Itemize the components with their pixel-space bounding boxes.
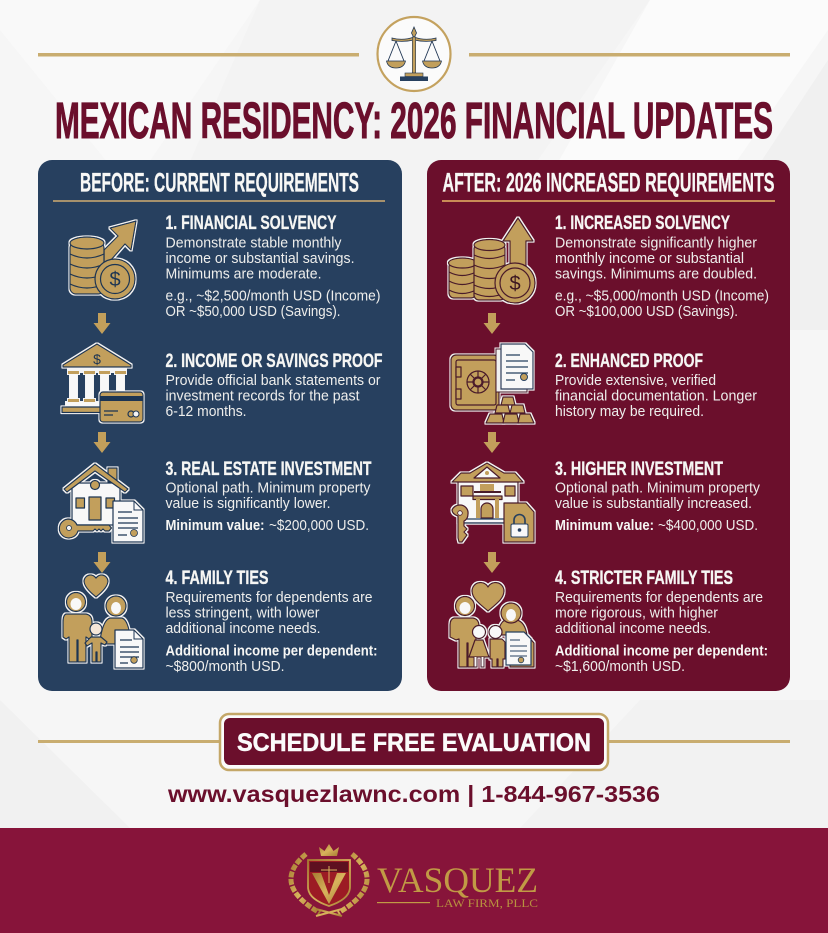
text: stricter family ties: additional income needs. xyxy=(555,621,711,637)
text: real estate investment: value is significantly lower. xyxy=(166,496,330,512)
text: enhanced proof xyxy=(555,351,757,420)
text: increased solvency: savings. Minimums are doubled. xyxy=(555,266,757,282)
text: family ties: less stringent, with lower xyxy=(166,606,320,622)
icon: larger family with document xyxy=(450,582,534,667)
text: family ties xyxy=(166,568,378,675)
footer band xyxy=(0,828,828,933)
text: income or savings proof: Provide official bank statements or xyxy=(166,373,381,389)
icon: coins with rising arrow: $ xyxy=(109,269,121,291)
text: income or savings proof: 2. INCOME OR SAVINGS PROOF xyxy=(166,351,382,372)
text: family ties: Requirements for dependents are xyxy=(166,590,372,606)
icon: coin stacks with up arrow: $ xyxy=(509,273,521,295)
arrow: step 2 to 3 xyxy=(94,432,110,453)
crown xyxy=(319,844,339,856)
CTA rule right xyxy=(607,740,790,743)
icon: bank and credit card xyxy=(62,344,143,422)
text: family ties: Additional income per dependent: xyxy=(166,644,378,660)
arrow: step 3 to 4 xyxy=(484,552,500,573)
text: stricter family ties: Requirements for dependents are xyxy=(555,590,763,606)
call to action button xyxy=(220,714,608,770)
icon: safe, documents and gold bars xyxy=(451,344,534,423)
logo wordmark: VASQUEZ xyxy=(377,860,538,900)
text: family ties: ~$800/month USD. xyxy=(166,659,284,675)
text: financial solvency: e.g., ~$2,500/month USD (Income) xyxy=(166,288,380,304)
text: financial solvency: income or substantial savings. xyxy=(166,251,354,267)
text: family ties: 4. FAMILY TIES xyxy=(166,568,268,589)
laurel wreath xyxy=(291,854,367,916)
icon: house, key and deed xyxy=(59,464,143,542)
icon: family with document xyxy=(63,575,143,668)
logo wordmark: LAW FIRM, PLLC xyxy=(436,896,538,910)
icon: coins with rising arrow xyxy=(70,221,136,299)
icon: mansion, key and locked document xyxy=(452,463,534,542)
text: income or savings proof: investment records for the past xyxy=(166,388,360,404)
text: real estate investment: 3. REAL ESTATE INVESTMENT xyxy=(166,459,372,480)
text: enhanced proof: financial documentation. Longer xyxy=(555,388,757,404)
contact details: www.vasquezlawnc.com | 1-844-967-3536 xyxy=(167,781,660,807)
panel background: after xyxy=(427,160,790,691)
icon: coin stacks with up arrow xyxy=(448,218,535,303)
heading rule: before xyxy=(53,200,385,202)
arrow: step 2 to 3 xyxy=(484,432,500,453)
arrow: step 1 to 2 xyxy=(94,313,110,334)
text: increased solvency: 1. INCREASED SOLVENCY xyxy=(555,213,730,234)
text: financial solvency: Demonstrate stable monthly xyxy=(166,236,342,252)
arrow: step 3 to 4 xyxy=(94,552,110,573)
text: enhanced proof: 2. ENHANCED PROOF xyxy=(555,351,703,372)
text: real estate investment xyxy=(166,459,372,534)
icon: bank and credit card: $ xyxy=(93,351,101,367)
text: financial solvency: OR ~$50,000 USD (Savings). xyxy=(166,304,340,320)
text: income or savings proof xyxy=(166,351,382,420)
text: increased solvency: e.g., ~$5,000/month USD (Income) xyxy=(555,288,769,304)
text: real estate investment: Minimum value: xyxy=(166,518,264,534)
heading rule: after xyxy=(442,200,775,202)
text: stricter family ties: 4. STRICTER FAMILY TIES xyxy=(555,568,733,589)
text: income or savings proof: 6-12 months. xyxy=(166,404,246,420)
text: enhanced proof: Provide extensive, verified xyxy=(555,373,716,389)
text: real estate investment: Optional path. Minimum property xyxy=(166,480,371,496)
text: financial solvency xyxy=(166,213,380,320)
text: stricter family ties: Additional income per dependent: xyxy=(555,644,768,660)
text: financial solvency: 1. FINANCIAL SOLVENCY xyxy=(166,213,337,234)
text: higher investment xyxy=(555,459,761,534)
text: higher investment: Minimum value: xyxy=(555,518,654,534)
logo: Vasquez Law Firm crest xyxy=(291,844,367,916)
header rule left xyxy=(38,53,359,56)
text: stricter family ties xyxy=(555,568,768,675)
arrow: step 1 to 2 xyxy=(484,313,500,334)
text: enhanced proof: history may be required. xyxy=(555,404,704,420)
text: real estate investment: ~$200,000 USD. xyxy=(269,518,369,534)
text: stricter family ties: more rigorous, with higher xyxy=(555,606,718,622)
text: stricter family ties: ~$1,600/month USD. xyxy=(555,659,685,675)
text: increased solvency: OR ~$100,000 USD (Savings). xyxy=(555,304,738,320)
text: higher investment: 3. HIGHER INVESTMENT xyxy=(555,459,723,480)
text: increased solvency: Demonstrate significantly higher xyxy=(555,236,757,252)
panel: after, 2026 increased requirements xyxy=(427,160,790,691)
CTA rule left xyxy=(38,740,220,743)
panel: before, current requirements xyxy=(38,160,402,691)
text: higher investment: Optional path. Minimum property xyxy=(555,480,761,496)
heading: before: BEFORE: CURRENT REQUIREMENTS xyxy=(80,168,359,198)
text: higher investment: ~$400,000 USD. xyxy=(658,518,758,534)
text: financial solvency: Minimums are moderate. xyxy=(166,266,322,282)
header rule right xyxy=(469,53,790,56)
text: increased solvency xyxy=(555,213,769,320)
shield xyxy=(308,860,350,906)
text: family ties: additional income needs. xyxy=(166,621,320,637)
text: increased solvency: monthly income or substantial xyxy=(555,251,744,267)
call to action button: SCHEDULE FREE EVALUATION xyxy=(237,729,591,757)
text: higher investment: value is substantially increased. xyxy=(555,496,752,512)
icon: scales of justice badge xyxy=(378,17,450,91)
panel background: before xyxy=(38,160,402,691)
